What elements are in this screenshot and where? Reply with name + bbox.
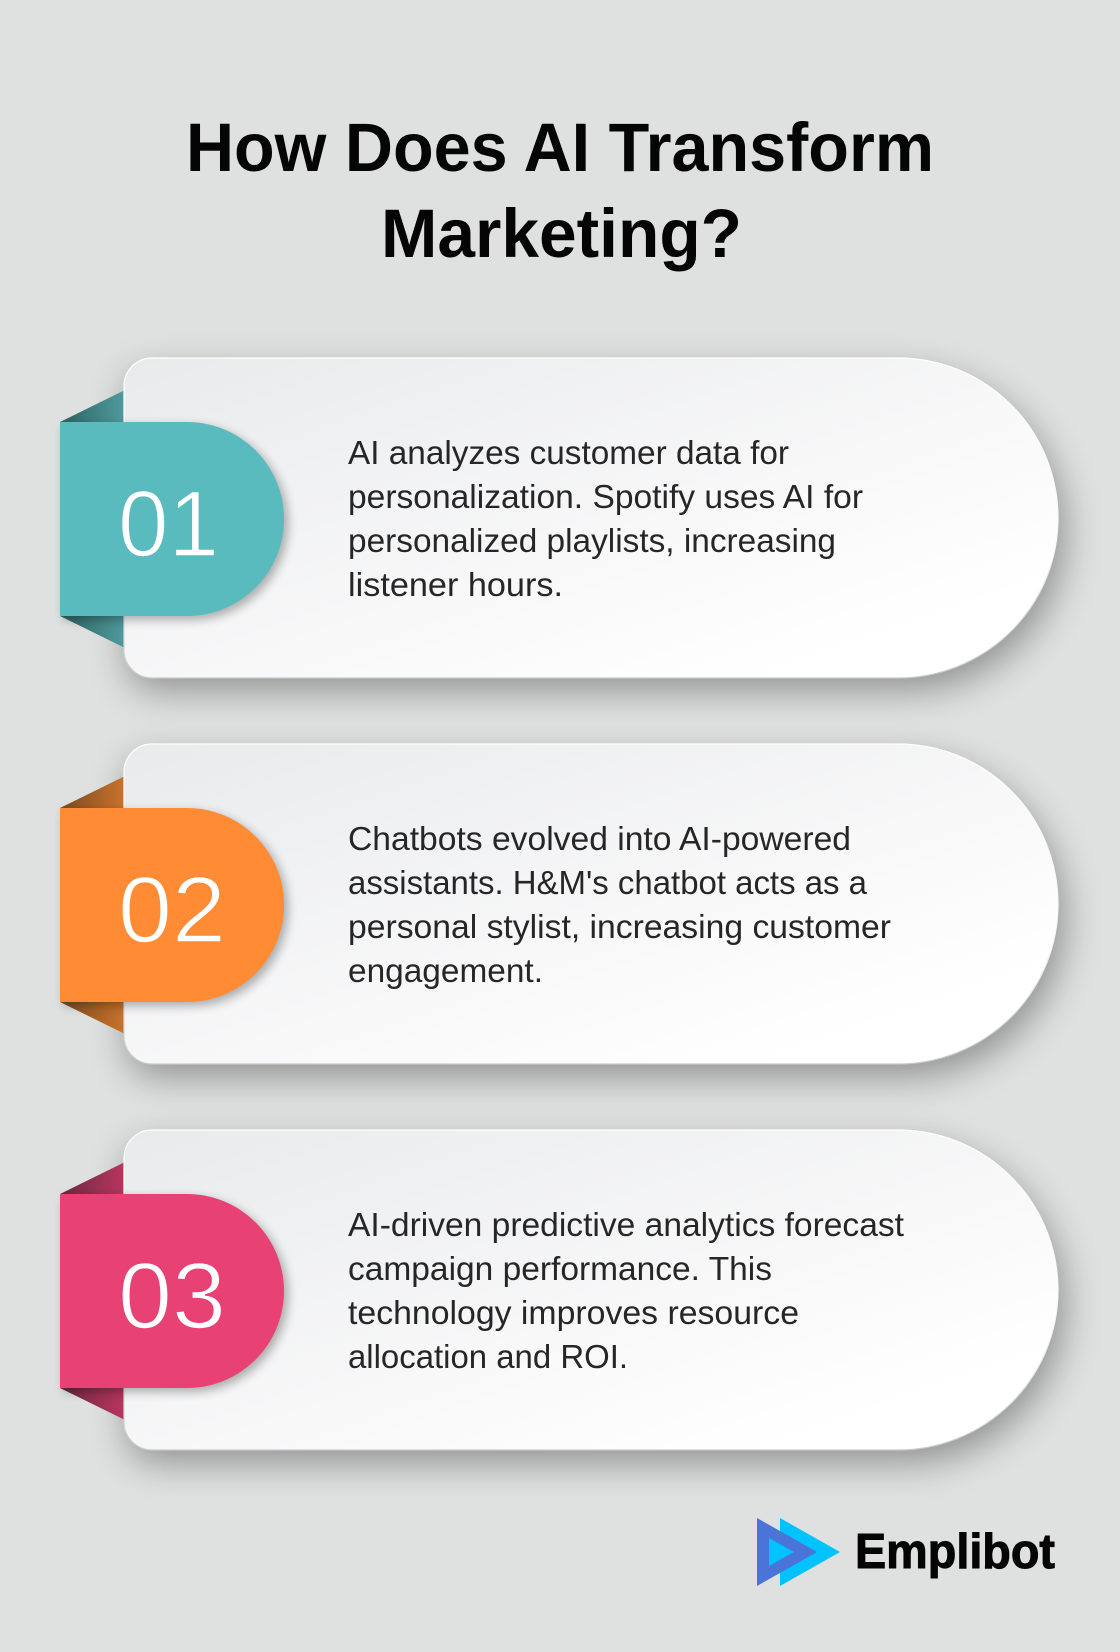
text: step 01 description: AI analyzes customer data for — [348, 434, 789, 471]
badge: number 03: 03 — [118, 1243, 226, 1348]
wordmark: Emplibot — [855, 1525, 1055, 1579]
text: step 03 description: technology improves resource — [348, 1294, 799, 1331]
text: step 03 description: AI-driven predictive analytics forecast — [348, 1206, 904, 1243]
text: step 02 description — [348, 820, 891, 989]
card — [124, 1130, 1058, 1450]
text: step 02 description: assistants. H&M's chatbot acts as a — [348, 864, 868, 901]
panel: step 01 — [60, 358, 1064, 690]
badge: number 01 — [60, 422, 288, 620]
fold: upper ribbon — [60, 776, 125, 808]
text: step 01 description: personalized playlists, increasing — [348, 522, 836, 559]
fold: lower ribbon — [60, 1002, 125, 1034]
fold: upper ribbon — [60, 1162, 125, 1194]
text: step 02 description: Chatbots evolved into AI-powered — [348, 820, 851, 857]
panel: step 02 — [60, 744, 1064, 1076]
fold: lower ribbon — [60, 616, 125, 648]
text: step 03 description — [348, 1206, 904, 1375]
title — [186, 109, 934, 272]
fold: upper ribbon — [60, 390, 125, 422]
badge: number 03 — [60, 1194, 288, 1392]
text: step 03 description: allocation and ROI. — [348, 1338, 628, 1375]
badge: number 02 — [60, 808, 288, 1006]
card — [124, 744, 1058, 1064]
card — [124, 358, 1058, 678]
text: step 02 description: personal stylist, increasing customer — [348, 908, 891, 945]
icon: play triangles — [757, 1518, 840, 1586]
text: step 01 description — [348, 434, 863, 603]
title: Marketing? — [381, 195, 742, 272]
text: step 01 description: listener hours. — [348, 566, 563, 603]
text: step 02 description: engagement. — [348, 952, 543, 989]
badge: number 01: 01 — [118, 471, 219, 576]
panel: step 03 — [60, 1130, 1064, 1462]
text: step 03 description: campaign performance. This — [348, 1250, 772, 1287]
logo: Emplibot — [757, 1518, 1055, 1586]
fold: lower ribbon — [60, 1388, 125, 1420]
text: step 01 description: personalization. Spotify uses AI for — [348, 478, 863, 515]
title: How Does AI Transform — [186, 109, 934, 186]
badge: number 02: 02 — [118, 857, 226, 962]
